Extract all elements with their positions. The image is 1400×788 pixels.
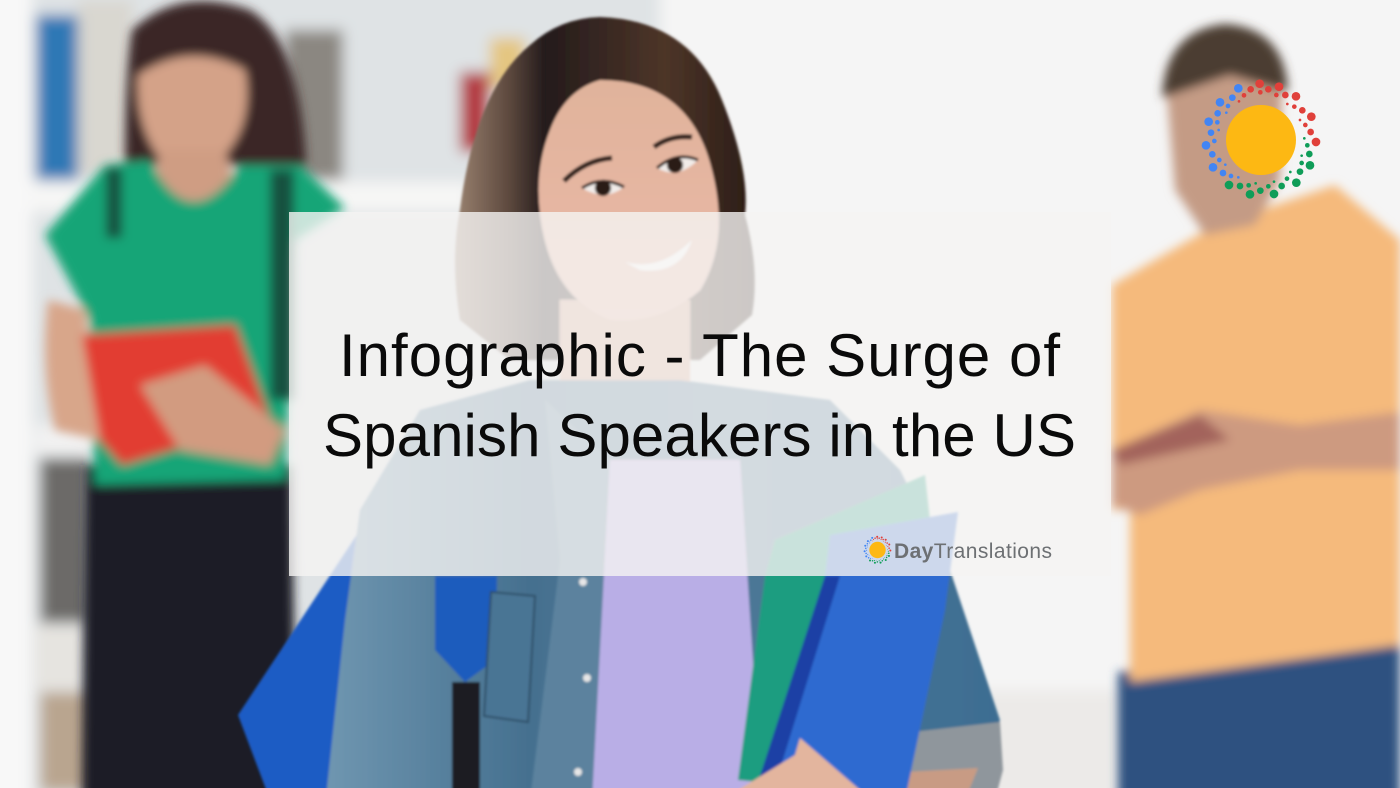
buttons [574,578,591,776]
hair [455,17,755,360]
face [539,80,719,321]
hand [722,738,860,788]
forearm [900,768,978,788]
green folder [738,475,930,782]
icon: large sun logo [1202,79,1320,199]
backpack [238,530,440,788]
central student, in focus [238,17,1003,788]
eyes [582,157,698,196]
left student, out of focus [45,1,345,788]
strap [435,576,497,682]
pocket [484,592,535,722]
neck [560,300,690,420]
right student, out of focus [1112,24,1400,788]
wordmark: DayTranslations [894,540,1052,563]
smile [625,240,692,271]
eyebrows [564,158,612,181]
title: Infographic - The Surge of [339,322,1060,389]
shirt [592,460,762,788]
title [323,322,1076,469]
title: Spanish Speakers in the US [323,402,1076,469]
icon: small sun logo [864,536,891,564]
translucent title panel [289,212,1111,576]
jacket [327,380,1000,788]
blue folder [758,512,958,788]
sleeve cuff [905,722,1003,788]
brand logo with wordmark [864,536,1052,564]
